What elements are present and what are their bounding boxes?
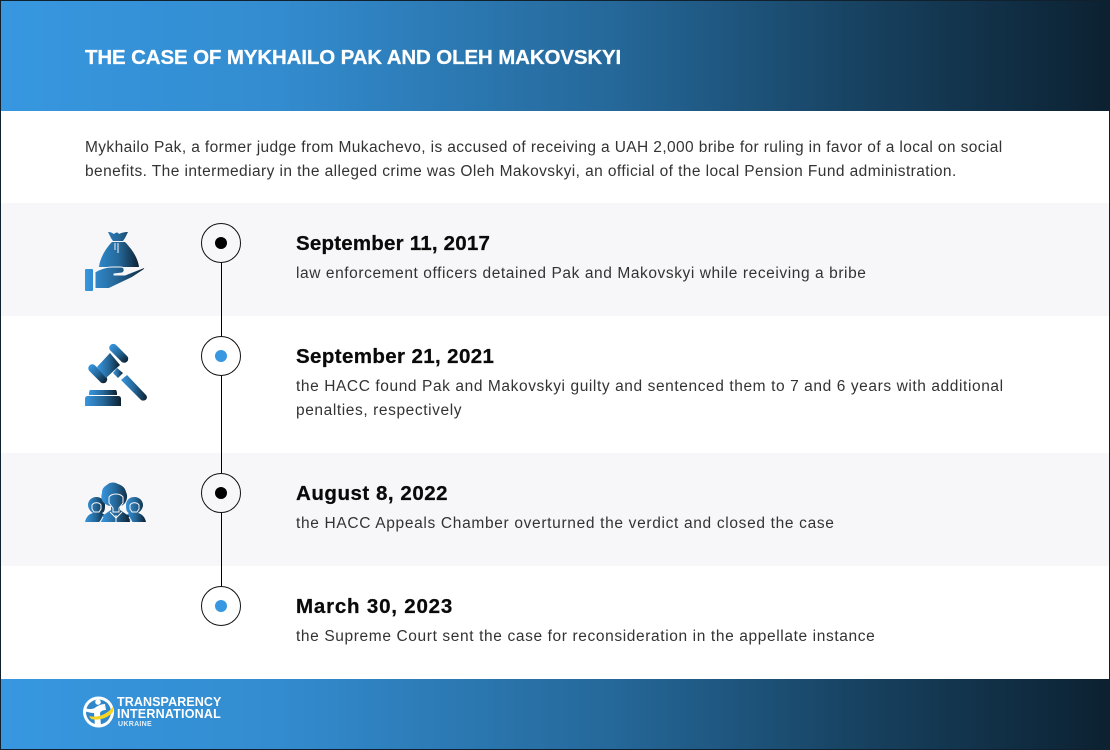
event 1 description: law enforcement officers detained Pak and Makovskyi while receiving a bribe [296,265,866,282]
event 2 description: penalties, respectively [296,402,462,419]
event 4 description: the Supreme Court sent the case for reconsideration in the appellate instance [296,628,875,645]
intro text [85,139,1003,180]
logo emblem [83,696,114,728]
event 2 description [296,378,1004,419]
title: THE CASE OF MYKHAILO PAK AND OLEH MAKOVSKYI [85,46,621,69]
event 4 date: March 30, 2023 [296,595,453,618]
row band: August 8, 2022 [0,453,1110,566]
logo: Transparency International Ukraine [83,695,222,728]
logo wordmark: INTERNATIONAL [117,707,221,721]
footer band [0,679,1110,750]
intro text: Mykhailo Pak, a former judge from Mukachevo, is accused of receiving a UAH 2,000 bribe for ruling in favor of a local on social [85,139,1003,156]
event 1 date: September 11, 2017 [296,232,490,255]
timeline node 4 [201,586,241,626]
timeline node 3 [201,473,241,513]
logo wordmark: TRANSPARENCY [117,695,221,709]
row band: September 11, 2017 [0,203,1110,316]
event 3 date: August 8, 2022 [296,482,448,505]
icon: gavel [85,344,147,406]
event 2 date: September 21, 2021 [296,345,494,368]
logo wordmark [117,695,222,721]
timeline line [221,262,222,587]
timeline node 1 [201,223,241,263]
header band [0,0,1110,111]
icon: group of three judges [85,482,146,522]
event 3 description: the HACC Appeals Chamber overturned the verdict and closed the case [296,515,835,532]
icon: hand holding money bag [85,232,144,291]
timeline node 2 [201,336,241,376]
logo subtitle: UKRAINE [118,721,152,728]
event 2 description: the HACC found Pak and Makovskyi guilty and sentenced them to 7 and 6 years with additional [296,378,1004,395]
intro text: benefits. The intermediary in the alleged crime was Oleh Makovskyi, an official of the local Pension Fund administration. [85,163,957,180]
